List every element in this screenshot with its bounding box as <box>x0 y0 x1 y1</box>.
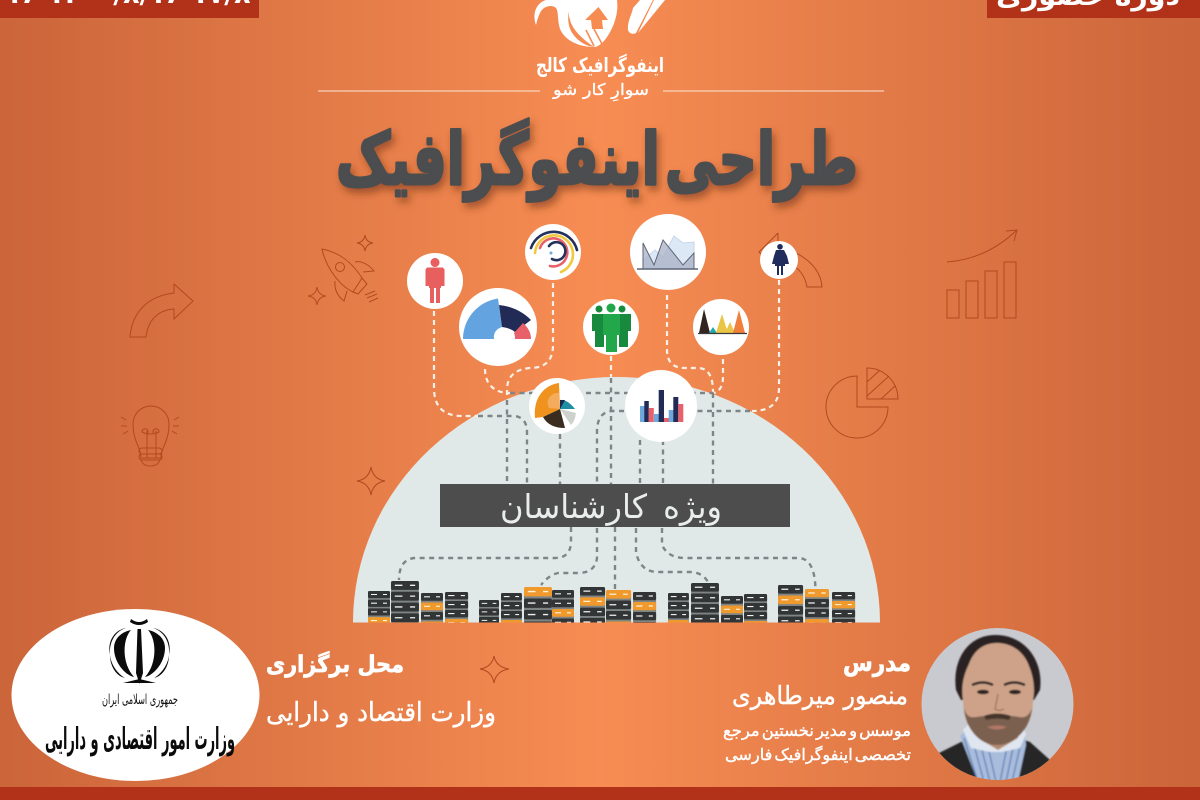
instructor bio line two: تخصصی اینفوگرافیک فارسی <box>725 745 911 765</box>
icon: sparkle <box>308 287 326 305</box>
emblem caption: جمهوری اسلامی ایران <box>102 692 178 708</box>
icon: sparkle near venue <box>480 656 509 683</box>
server racks <box>368 581 856 622</box>
data circle: green people <box>583 299 639 355</box>
data circle: bar chart <box>625 370 697 442</box>
logo wordmark: اینفوگرافیک کالج <box>536 53 664 77</box>
icon: light bulb <box>121 406 179 466</box>
text: وزارت امور اقتصادی و دارایی <box>45 722 235 757</box>
course type banner top right <box>987 0 1200 18</box>
data circle: semi donut <box>459 288 537 366</box>
icon: rising bar chart <box>947 230 1017 318</box>
venue heading: محل برگزاری <box>266 651 404 678</box>
title: طراحی اینفوگرافیک <box>336 117 858 202</box>
data circle: red person <box>407 253 463 309</box>
data circle: radial pie <box>529 378 585 434</box>
dome <box>353 377 880 622</box>
icon: outline arrow behind woman circle <box>759 233 822 287</box>
banner: experts: ویژه کارشناسان <box>500 487 722 526</box>
bottom bar <box>0 787 1200 800</box>
icon: pie chart <box>826 368 898 438</box>
icon: curved arrow <box>130 284 193 337</box>
white connector lines <box>434 280 779 416</box>
banner: experts <box>440 484 790 527</box>
venue name: وزارت اقتصاد و دارایی <box>266 698 496 728</box>
logo slogan: سوارِ کار شو <box>552 80 649 102</box>
logo mark <box>534 0 665 47</box>
data circle: area chart <box>630 214 706 290</box>
data circle: peaks chart <box>693 299 749 355</box>
icon: large sparkle <box>357 467 385 495</box>
emblem <box>109 619 170 684</box>
logo <box>318 0 884 102</box>
icon: rocket <box>322 249 378 302</box>
data circle: ring chart <box>525 224 581 280</box>
ministry logo <box>12 609 260 781</box>
instructor heading: مدرس <box>843 649 911 677</box>
instructor bio line one: موسس و مدیر نخستین مرجع <box>723 721 911 741</box>
instructor name: منصور میرطاهری <box>732 681 908 710</box>
venue text block <box>266 651 496 728</box>
instructor portrait <box>920 626 1076 790</box>
icon: small sparkle <box>357 235 373 251</box>
instructor text block <box>723 649 911 765</box>
data circle: woman <box>760 241 798 279</box>
date banner top left <box>0 0 259 18</box>
grey connector lines <box>399 378 816 590</box>
